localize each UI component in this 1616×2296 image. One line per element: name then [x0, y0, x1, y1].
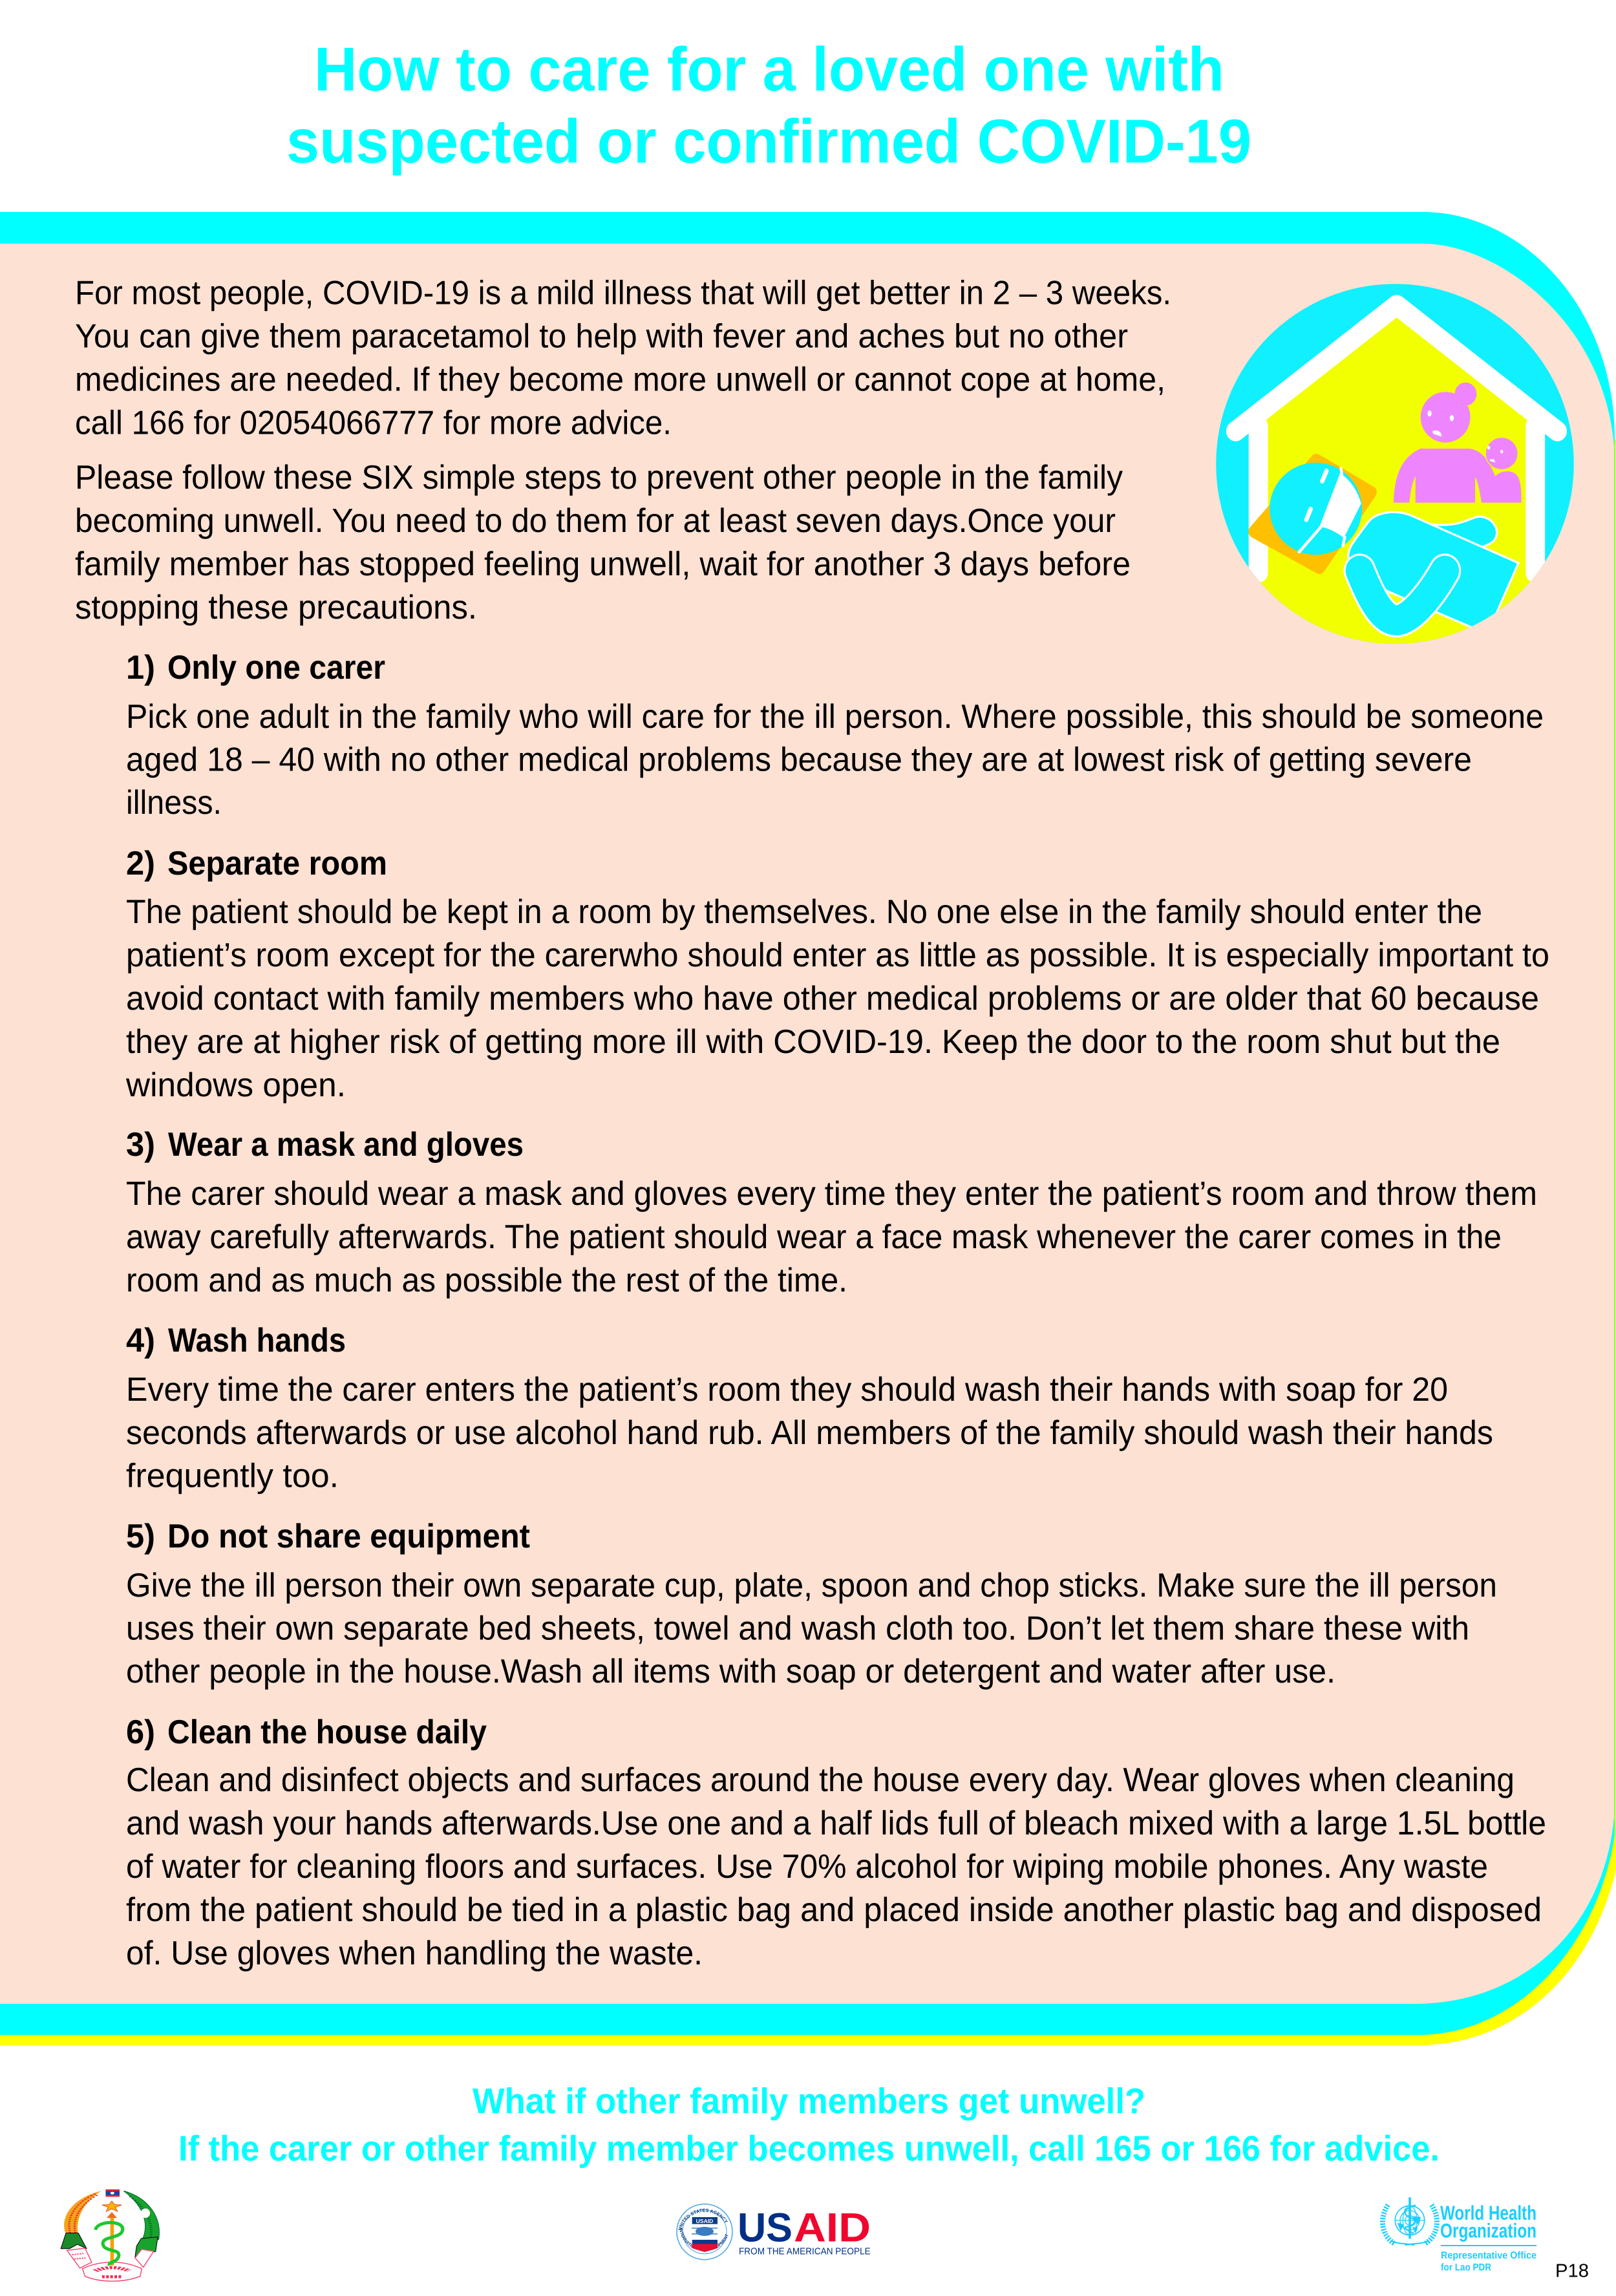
WHO wordmark: Representative Office — [1441, 2250, 1536, 2261]
WHO wordmark: for Lao PDR — [1441, 2262, 1491, 2273]
WHO wordmark: Organization — [1440, 2220, 1536, 2242]
step 6: clean the house daily — [126, 1714, 1546, 1972]
step 2 heading: 2) — [126, 845, 155, 882]
step 6 heading: 6) — [126, 1714, 155, 1751]
WHO wordmark: World Health — [1440, 2202, 1536, 2224]
step 3: wear a mask and gloves: away carefully afterwards. The patient should wear a face mask whenever the carer comes in the — [126, 1218, 1502, 1256]
intro paragraph 2 — [75, 459, 1131, 626]
step 4 heading: 4) — [126, 1322, 155, 1359]
step 2 heading: Separate room — [167, 845, 387, 882]
intro paragraph 2: becoming unwell. You need to do them for at least seven days.Once your — [75, 502, 1116, 540]
step 6 heading: Clean the house daily — [167, 1714, 487, 1751]
USAID wordmark — [738, 2206, 871, 2251]
step 4: wash hands — [126, 1322, 1493, 1494]
step 6: clean the house daily: Clean and disinfect objects and surfaces around the house every day. Wear gloves when cleaning — [126, 1761, 1515, 1799]
step 6: clean the house daily: from the patient should be tied in a plastic bag and placed inside another plastic bag and disposed — [126, 1891, 1542, 1929]
step 4: wash hands: Every time the carer enters the patient’s room they should wash their hands with soap for 20 — [126, 1371, 1448, 1408]
step 5: do not share equipment: uses their own separate bed sheets, towel and wash cloth too. Don’t let them share these with — [126, 1610, 1469, 1647]
intro paragraph 2: Please follow these SIX simple steps to prevent other people in the family — [75, 459, 1123, 496]
step 1: only one carer: aged 18 – 40 with no other medical problems because they are at lowest risk of getting severe — [126, 741, 1472, 778]
logo: World Health Organization — [1383, 2197, 1536, 2273]
USAID tagline: FROM THE AMERICAN PEOPLE — [739, 2246, 871, 2257]
footer callout: what if other family members get unwell — [178, 2081, 1440, 2168]
intro paragraph 2: stopping these precautions. — [75, 589, 477, 626]
intro paragraph 1: You can give them paracetamol to help with fever and aches but no other — [75, 318, 1128, 356]
step 4: wash hands: frequently too. — [126, 1457, 339, 1494]
step 6: clean the house daily: and wash your hands afterwards.Use one and a half lids full of bleach mixed with a large 1.5L bottle — [126, 1805, 1546, 1842]
step 2: separate room: avoid contact with family members who have other medical problems or are older that 60 because — [126, 980, 1539, 1017]
intro paragraph 2: family member has stopped feeling unwell, wait for another 3 days before — [75, 546, 1131, 583]
cyan band — [0, 212, 1615, 2035]
step 1 heading: Only one carer — [167, 649, 385, 686]
icon: house with masked patient and family — [1216, 284, 1574, 657]
step 3: wear a mask and gloves — [126, 1126, 1537, 1299]
step 2: separate room: windows open. — [125, 1067, 346, 1104]
yellow backing band — [0, 440, 1616, 2045]
step 2: separate room: they are at higher risk of getting more ill with COVID-19. Keep the door to the room shut but the — [126, 1023, 1500, 1061]
step 5: do not share equipment — [126, 1518, 1497, 1690]
step 2: separate room: patient’s room except for the carerwho should enter as little as possible. It is especially important to — [126, 937, 1549, 974]
step 4: wash hands: seconds afterwards or use alcohol hand rub. All members of the family should wash their hands — [126, 1414, 1493, 1452]
step 6: clean the house daily: of. Use gloves when handling the waste. — [126, 1935, 703, 1972]
intro paragraph 1: medicines are needed. If they become more unwell or cannot cope at home, — [75, 361, 1165, 398]
title: suspected or confirmed COVID-19 — [286, 107, 1251, 176]
page number: P18 — [1555, 2261, 1589, 2282]
USAID seal — [676, 2204, 733, 2260]
footer callout: what if other family members get unwell: If the carer or other family member becomes unwell, call 165 or 166 for advice. — [178, 2128, 1440, 2168]
intro paragraph 1: call 166 for 02054066777 for more advice. — [75, 405, 672, 442]
step 6: clean the house daily: of water for cleaning floors and surfaces. Use 70% alcohol for wiping mobile phones. Any waste — [126, 1848, 1488, 1886]
step 1: only one carer: illness. — [126, 784, 222, 822]
step 3 heading: 3) — [126, 1126, 155, 1164]
step 1: only one carer: Pick one adult in the family who will care for the ill person. Where possible, this should be someone — [126, 698, 1544, 736]
panel: main content — [0, 212, 1616, 2045]
footer callout: what if other family members get unwell: What if other family members get unwell? — [473, 2081, 1145, 2121]
USAID seal: INTERNATIONAL DEVELOPMENT — [679, 2227, 728, 2251]
step 5: do not share equipment: other people in the house.Wash all items with soap or detergent and water after use. — [126, 1653, 1335, 1690]
step 5 heading: 5) — [126, 1518, 155, 1555]
intro paragraph 1: For most people, COVID-19 is a mild illness that will get better in 2 – 3 weeks. — [75, 274, 1171, 312]
step 4 heading: Wash hands — [168, 1322, 346, 1359]
WHO emblem — [1383, 2197, 1437, 2245]
step 5 heading: Do not share equipment — [167, 1518, 530, 1555]
step 3 heading: Wear a mask and gloves — [168, 1126, 524, 1164]
title: How to care for a loved one with — [314, 35, 1224, 104]
step 1 heading: 1) — [126, 649, 155, 686]
step 2: separate room — [125, 845, 1549, 1104]
USAID seal: USAID — [696, 2218, 713, 2224]
title — [286, 35, 1251, 176]
step 3: wear a mask and gloves: room and as much as possible the rest of the time. — [126, 1262, 847, 1299]
peach panel background — [0, 244, 1614, 2004]
USAID seal: UNITED STATES AGENCY — [678, 2208, 728, 2230]
USAID wordmark: US — [738, 2206, 792, 2251]
logo: Lao Ministry of Health emblem — [61, 2189, 159, 2281]
intro paragraph 1 — [75, 274, 1171, 442]
WHO wordmark — [1440, 2202, 1536, 2273]
step 5: do not share equipment: Give the ill person their own separate cup, plate, spoon and chop sticks. Make sure the ill person — [126, 1567, 1497, 1604]
step 3: wear a mask and gloves: The carer should wear a mask and gloves every time they enter the patient’s room and throw them — [126, 1175, 1537, 1213]
USAID wordmark: AID — [794, 2206, 871, 2251]
step 1: only one carer — [126, 649, 1544, 822]
step 2: separate room: The patient should be kept in a room by themselves. No one else in the family should enter the — [126, 893, 1482, 931]
logo: USAID — [676, 2204, 871, 2260]
